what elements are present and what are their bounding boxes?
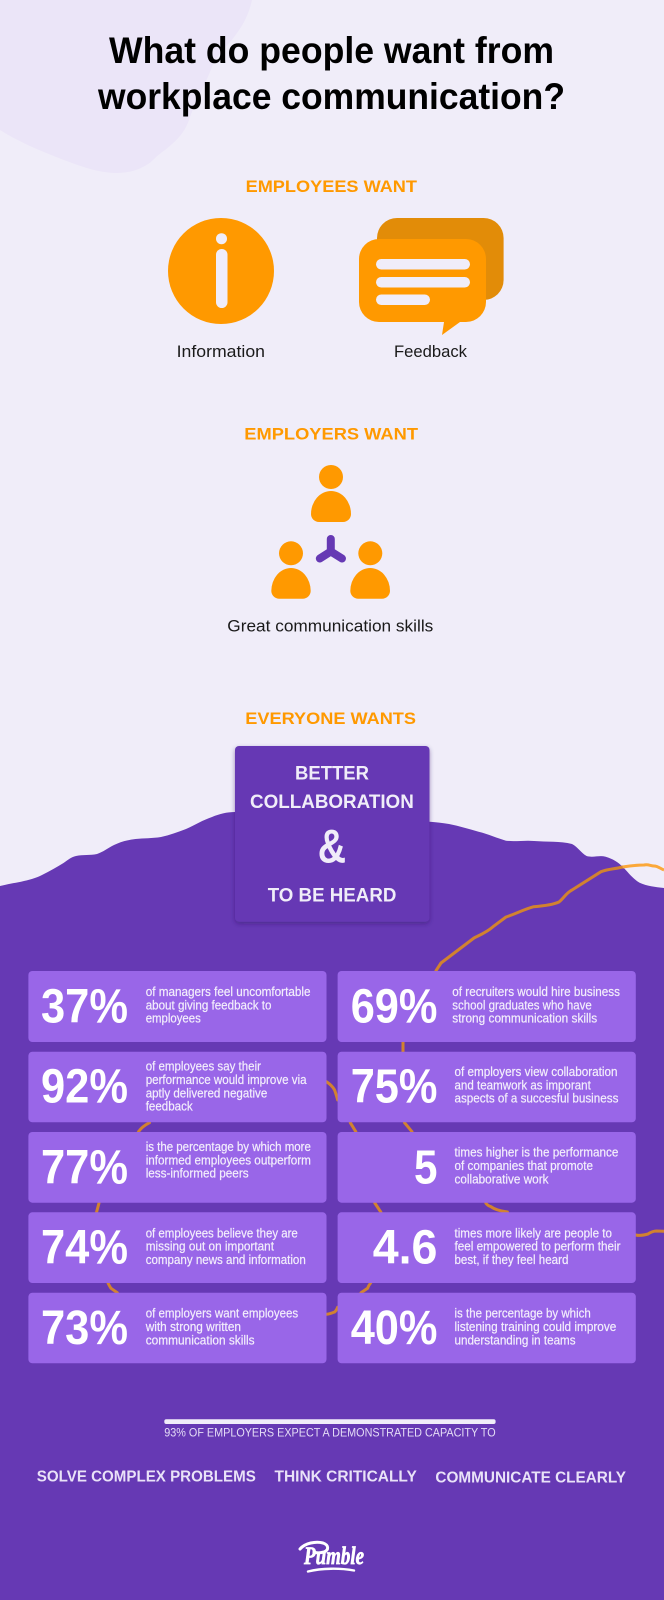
stat card: 37%: 37% — [41, 980, 128, 1033]
label: feedback: Feedback — [394, 343, 468, 361]
stat card: 92% — [28, 1052, 327, 1122]
stat card: 40%: is the percentage by which — [454, 1306, 591, 1321]
panel: everyone wants card — [235, 746, 430, 922]
stat card: 92%: aptly delivered negative — [146, 1085, 267, 1100]
orange squiggle line — [97, 865, 664, 1314]
logo: Pumble — [300, 1542, 364, 1572]
stat card: 92%: feedback — [146, 1099, 193, 1114]
stat card: 40%: listening training could improve — [454, 1319, 616, 1334]
stat card: 77%: 77% — [41, 1141, 128, 1194]
stat card: 5 times — [338, 1132, 636, 1203]
panel: everyone wants card: TO BE HEARD — [268, 886, 396, 907]
skill: think critically: THINK CRITICALLY — [274, 1469, 417, 1486]
panel: everyone wants card: COLLABORATION — [250, 792, 414, 813]
stat card: 4.6 times: 4.6 — [373, 1221, 438, 1274]
panel: everyone wants card: BETTER — [295, 763, 369, 784]
icon: three people connected — [271, 465, 390, 599]
stat card: 74%: of employees believe they are — [146, 1225, 298, 1240]
caption: 93% of employers: 93% OF EMPLOYERS EXPECT A DEMONSTRATED CAPACITY TO — [164, 1427, 496, 1440]
stat card: 40% — [338, 1293, 636, 1363]
stat card: 77%: less-informed peers — [146, 1166, 249, 1181]
stat card: 74%: company news and information — [146, 1252, 306, 1267]
heading: everyone wants: EVERYONE WANTS — [245, 709, 416, 728]
stat card: 69%: school graduates who have — [452, 997, 592, 1012]
label: great communication skills: Great communication skills — [227, 618, 433, 636]
stat card: 77% — [28, 1132, 327, 1203]
stat card: 5 times: collaborative work — [454, 1171, 549, 1186]
stat card: 73%: with strong written — [145, 1319, 241, 1334]
stat card: 75% — [338, 1052, 636, 1122]
icon: feedback speech bubbles — [359, 218, 504, 335]
stat card: 92%: of employees say their — [146, 1059, 262, 1074]
heading: employees want: EMPLOYEES WANT — [246, 177, 418, 196]
stat card: 92%: performance would improve via — [146, 1072, 307, 1087]
stat card: 4.6 times: times more likely are people to — [454, 1225, 612, 1240]
stat card: 75%: of employers view collaboration — [454, 1064, 618, 1079]
title — [97, 30, 565, 117]
stat card: 40%: 40% — [351, 1302, 438, 1355]
stat card: 74% — [28, 1212, 327, 1283]
title: What do people want from — [109, 30, 554, 71]
stat card: 75%: and teamwork as imporant — [454, 1077, 591, 1092]
stat card: 69%: of recruiters would hire business — [452, 984, 620, 999]
skill: communicate clearly: COMMUNICATE CLEARLY — [435, 1470, 627, 1487]
stat card: 75%: aspects of a succesful business — [454, 1091, 619, 1106]
stat card: 74%: missing out on important — [146, 1239, 274, 1254]
title: workplace communication? — [97, 76, 565, 117]
stat card: 73% — [28, 1293, 327, 1363]
stat card: 74%: 74% — [41, 1221, 128, 1274]
panel: everyone wants card: & — [318, 820, 346, 873]
stat card: 69%: 69% — [351, 980, 438, 1033]
stat card: 4.6 times — [338, 1212, 636, 1283]
stat card: 4.6 times: feel empowered to perform their — [454, 1239, 621, 1254]
stat card: 75%: 75% — [351, 1061, 438, 1114]
logo: Pumble: Pumble — [303, 1543, 364, 1570]
stat card: 37% — [28, 971, 327, 1042]
decorative blob — [0, 0, 252, 173]
caption: 93% of employers — [164, 1419, 496, 1440]
label: information: Information — [177, 343, 265, 361]
stat card: 73%: of employers want employees — [146, 1306, 299, 1321]
heading: employers want: EMPLOYERS WANT — [244, 424, 419, 443]
stat card: 4.6 times: best, if they feel heard — [454, 1252, 568, 1267]
stat card: 77%: informed employees outperform — [146, 1152, 311, 1167]
stat card: 5 times: 5 — [414, 1141, 438, 1194]
stat card: 5 times: times higher is the performance — [454, 1145, 618, 1160]
stat card: 5 times: of companies that promote — [454, 1158, 593, 1173]
stat card: 37%: of managers feel uncomfortable — [146, 984, 310, 999]
stat card: 73%: communication skills — [146, 1332, 255, 1347]
stat card: 37%: about giving feedback to — [146, 997, 272, 1012]
stat card: 73%: 73% — [41, 1302, 128, 1355]
purple hill background — [0, 812, 664, 1600]
stat card: 92%: 92% — [41, 1061, 128, 1114]
stat card: 40%: understanding in teams — [454, 1332, 576, 1347]
stat card: 77%: is the percentage by which more — [146, 1139, 311, 1154]
icon: information — [168, 218, 274, 324]
stat card: 69%: strong communication skills — [452, 1011, 598, 1026]
stat card: 69% — [338, 971, 636, 1042]
stat card: 37%: employees — [146, 1011, 201, 1026]
skill: solve complex problems: SOLVE COMPLEX PROBLEMS — [37, 1469, 256, 1486]
